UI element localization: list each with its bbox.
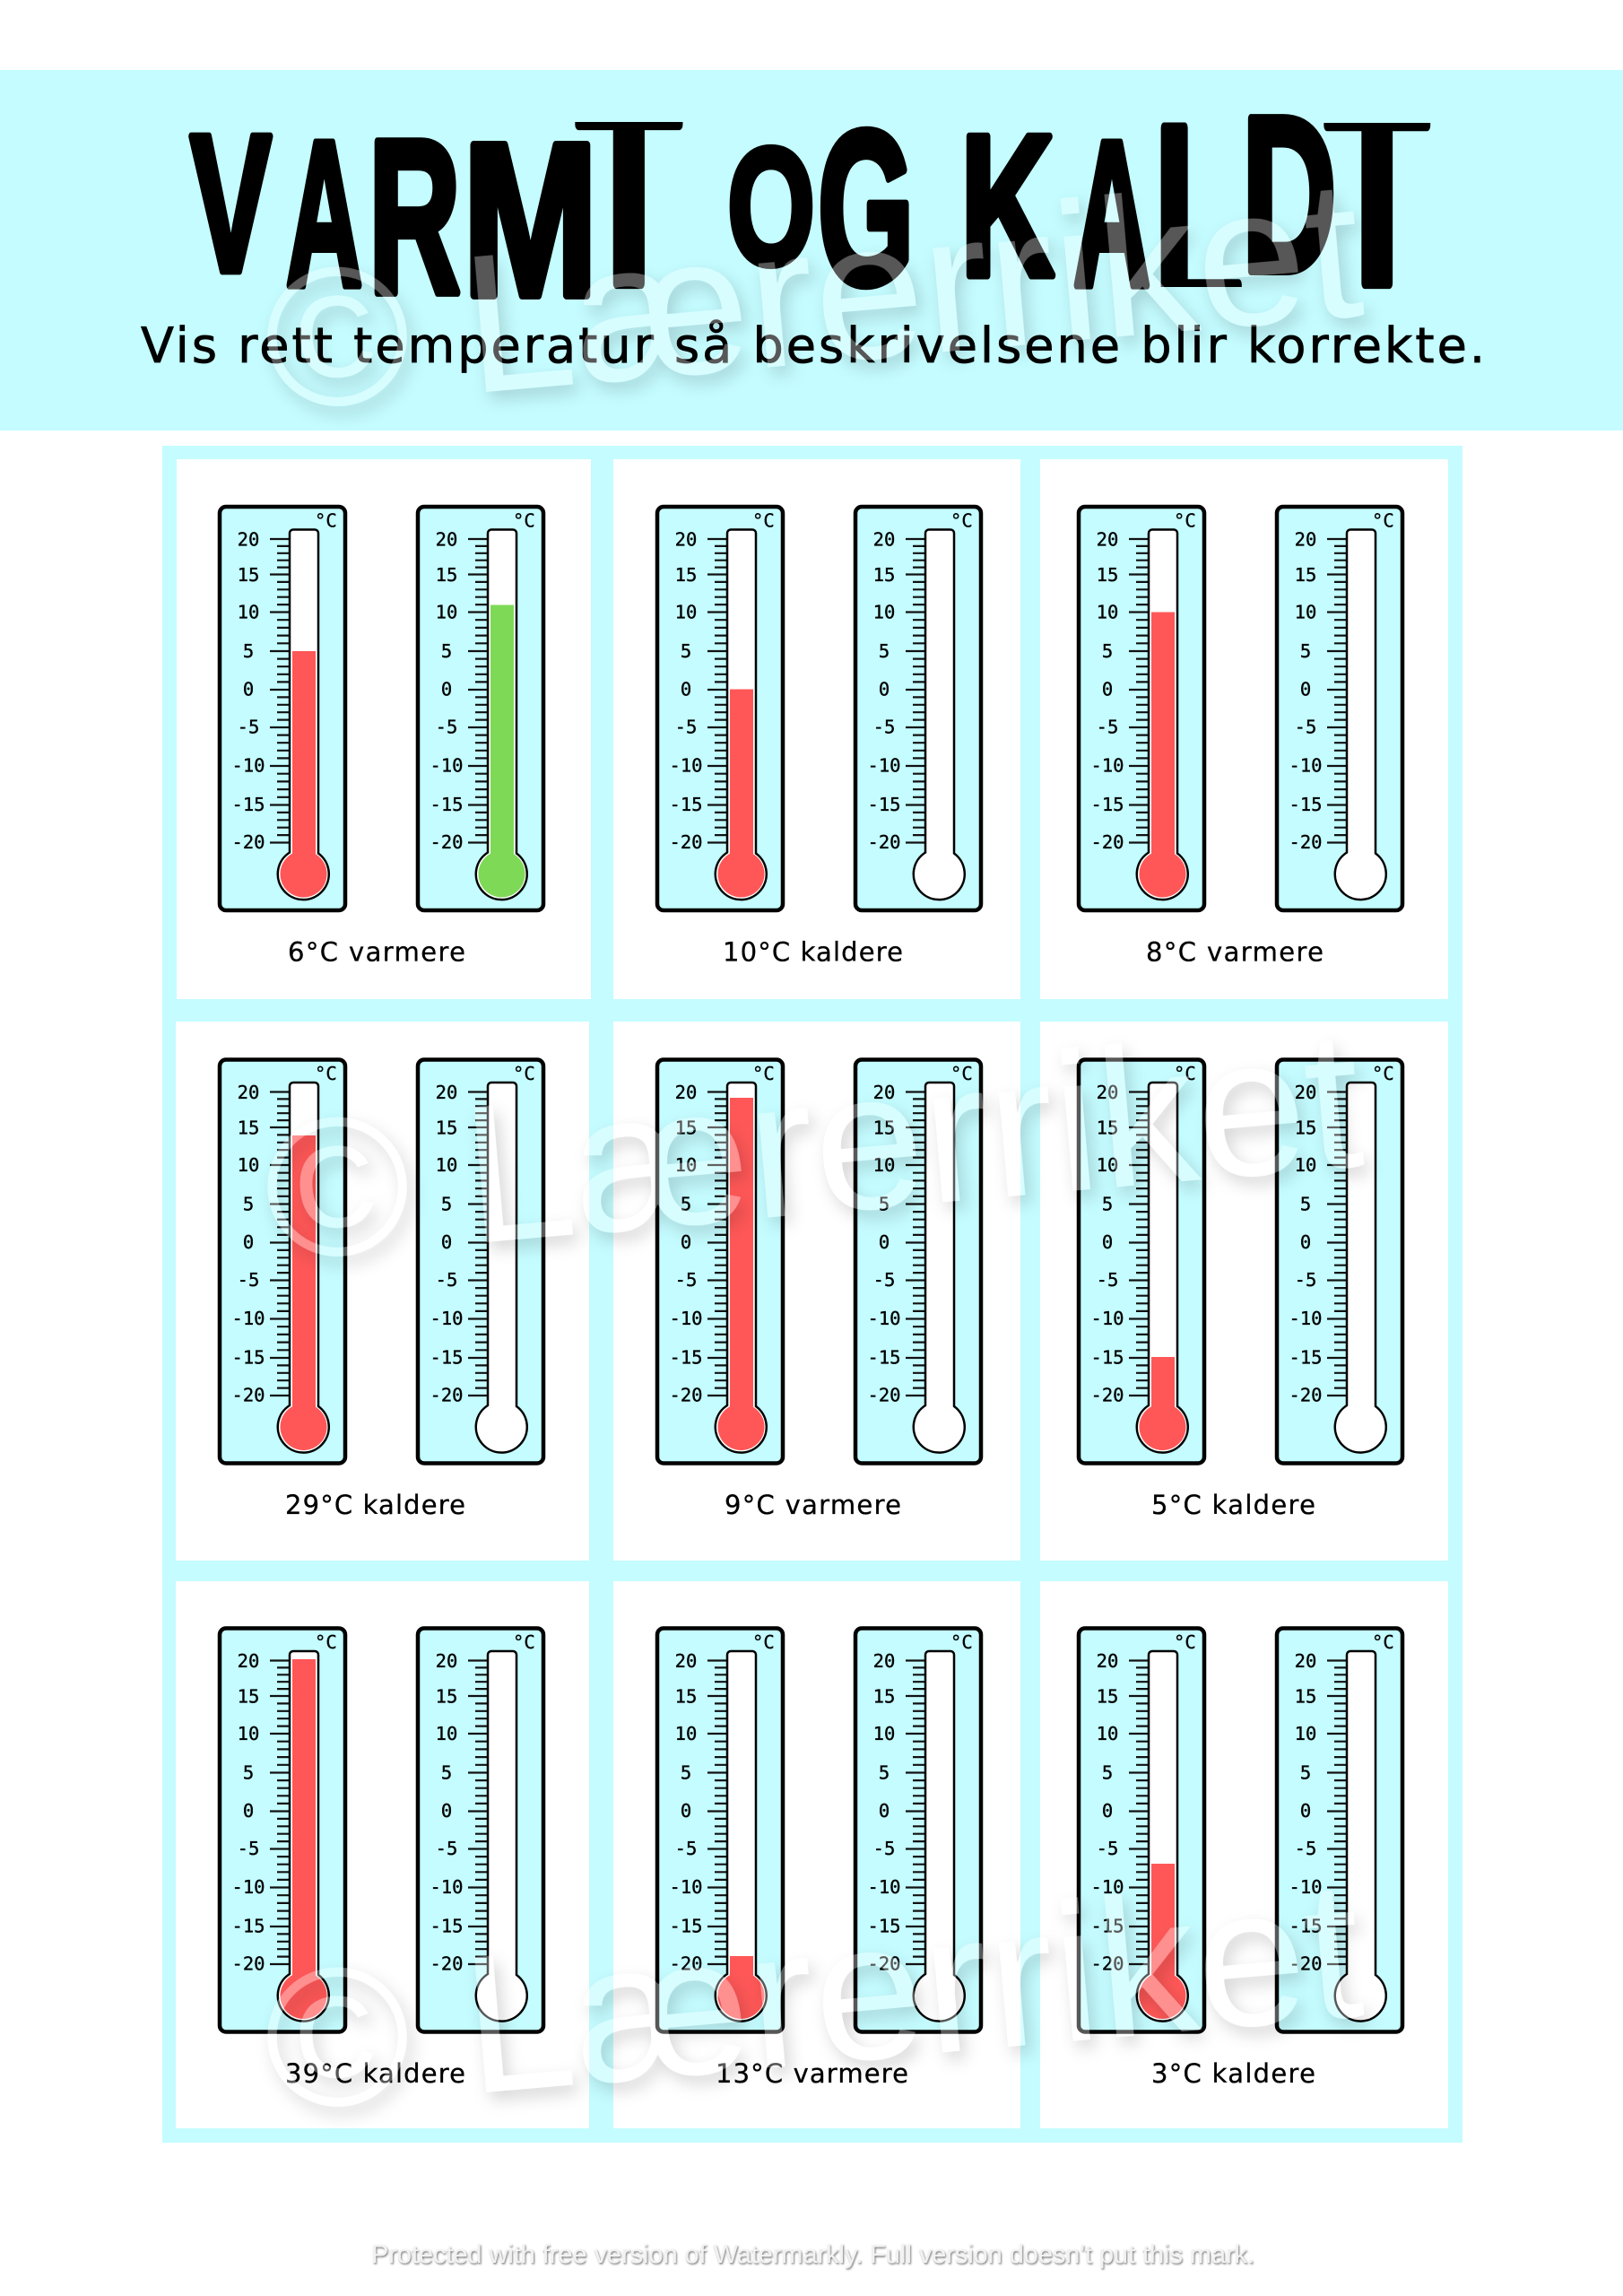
thermometer: empty: 5 <box>441 1193 452 1214</box>
thermometer: red at 0: -20 <box>669 831 703 853</box>
thermometer: empty: -20 <box>1289 1953 1323 1975</box>
thermometer: red at -19 <box>657 1629 783 2032</box>
thermometer: empty: 20 <box>436 1650 457 1672</box>
thermometer: red at -19: -10 <box>669 1876 703 1898</box>
thermometer: red at 14: 0 <box>243 1231 254 1253</box>
thermometer: empty: -15 <box>1289 794 1323 815</box>
thermometer: empty: 0 <box>879 1800 890 1822</box>
thermometer: red at 10: -10 <box>1090 755 1124 777</box>
thermometer: red at -15 <box>1079 1060 1204 1464</box>
thermometer: empty: -5 <box>1295 1838 1316 1859</box>
header band <box>0 70 1623 430</box>
thermometer: empty: 10 <box>873 601 895 622</box>
title: K <box>960 94 1055 319</box>
thermometer: red at 19: -10 <box>669 1308 703 1329</box>
thermometer: empty: 10 <box>1295 1723 1316 1744</box>
thermometer: red at -15: -5 <box>1097 1269 1118 1291</box>
title: D <box>1242 70 1336 317</box>
thermometer: red at -19: 0 <box>681 1800 691 1822</box>
panel: 13°C varmere <box>613 1581 1020 2128</box>
thermometer: red at 20: °C <box>315 1631 337 1653</box>
thermometer: empty: °C <box>1372 1063 1394 1084</box>
panel: 6°C varmere <box>177 459 591 999</box>
thermometer: red at 5: -15 <box>231 794 265 815</box>
thermometer: red at 20: 15 <box>238 1686 259 1708</box>
thermometer: red at 10: -20 <box>1090 831 1124 853</box>
title <box>188 114 1431 300</box>
thermometer: red at 19: -5 <box>675 1269 697 1291</box>
thermometer: green at 11: 15 <box>436 564 457 586</box>
thermometer: red at -7 <box>1079 1629 1204 2032</box>
thermometer: empty: -20 <box>867 1953 901 1975</box>
thermometer: red at 14: 20 <box>238 1082 259 1103</box>
caption: 3°C kaldere <box>1151 2058 1315 2089</box>
thermometer: empty <box>1277 1629 1402 2032</box>
thermometer: empty: -15 <box>867 794 901 815</box>
thermometer: red at 10: 10 <box>1097 601 1118 622</box>
thermometer: red at 20: -5 <box>238 1838 259 1859</box>
thermometer: empty: 5 <box>1300 640 1311 662</box>
thermometer: red at 0: 10 <box>675 601 697 622</box>
thermometer: red at -7: -10 <box>1090 1876 1124 1898</box>
thermometer: red at 20: 5 <box>243 1761 254 1783</box>
title: A <box>1073 98 1150 329</box>
thermometer: empty: 20 <box>1295 1082 1316 1103</box>
thermometer: red at 20: 0 <box>243 1800 254 1822</box>
caption: 13°C varmere <box>716 2058 908 2089</box>
thermometer: red at 5: -5 <box>238 716 259 737</box>
thermometer: empty: 15 <box>873 564 895 586</box>
thermometer: empty: 0 <box>879 1231 890 1253</box>
thermometer: red at 5: -20 <box>231 831 265 853</box>
thermometer: red at 0: 20 <box>675 529 697 551</box>
caption: 6°C varmere <box>288 936 465 967</box>
thermometer: red at -7: 15 <box>1097 1686 1118 1708</box>
thermometer: empty: -10 <box>867 755 901 777</box>
thermometer: empty: -15 <box>867 1916 901 1937</box>
thermometer: red at 5 <box>220 507 345 910</box>
thermometer: empty: -15 <box>1289 1347 1323 1369</box>
thermometer: empty: 15 <box>436 1118 457 1139</box>
thermometer: red at 14: °C <box>315 1063 337 1084</box>
thermometer: red at 20: 10 <box>238 1723 259 1744</box>
thermometer: empty: 20 <box>873 1082 895 1103</box>
thermometer: empty: 5 <box>441 1761 452 1783</box>
thermometer: empty: 0 <box>879 678 890 700</box>
thermometer: empty: -5 <box>1295 1269 1316 1291</box>
thermometer: red at 5: 20 <box>238 529 259 551</box>
thermometer: green at 11: -15 <box>430 794 464 815</box>
thermometer: red at -7: 5 <box>1102 1761 1113 1783</box>
thermometer: empty: 10 <box>873 1723 895 1744</box>
title: G <box>818 87 914 331</box>
thermometer: red at -19: -20 <box>669 1953 703 1975</box>
thermometer: empty: 20 <box>873 529 895 551</box>
thermometer: empty: -10 <box>430 1308 464 1329</box>
thermometer: empty: -10 <box>1289 755 1323 777</box>
thermometer: red at 10: 15 <box>1097 564 1118 586</box>
thermometer: red at -19: 20 <box>675 1650 697 1672</box>
thermometer: empty: 20 <box>436 1082 457 1103</box>
thermometer: empty: -20 <box>867 1385 901 1406</box>
thermometer: empty: °C <box>950 509 973 531</box>
thermometer: red at 20: 20 <box>238 1650 259 1672</box>
thermometer: green at 11: 10 <box>436 601 457 622</box>
thermometer: red at 19 <box>657 1060 783 1464</box>
thermometer: red at 19: 0 <box>681 1231 691 1253</box>
thermometer: empty <box>855 1629 981 2032</box>
thermometer: red at 14: 15 <box>238 1118 259 1139</box>
thermometer: red at 0: 0 <box>681 678 691 700</box>
thermometer: empty: -15 <box>430 1347 464 1369</box>
thermometer: empty: 0 <box>1300 1800 1311 1822</box>
thermometer: red at 14: -20 <box>231 1385 265 1406</box>
thermometer: red at 14: -5 <box>238 1269 259 1291</box>
thermometer: empty <box>855 507 981 910</box>
thermometer: red at -15: °C <box>1174 1063 1196 1084</box>
thermometer: empty: -5 <box>436 1838 457 1859</box>
thermometer: red at -19: 10 <box>675 1723 697 1744</box>
thermometer: red at -7: 20 <box>1097 1650 1118 1672</box>
thermometer: red at 10: 5 <box>1102 640 1113 662</box>
thermometer: empty: 15 <box>436 1686 457 1708</box>
thermometer: empty: 10 <box>1295 1154 1316 1176</box>
thermometer: red at 0: -10 <box>669 755 703 777</box>
thermometer: red at -19: 5 <box>681 1761 691 1783</box>
thermometer: red at 10: 0 <box>1102 678 1113 700</box>
title: O <box>727 113 815 300</box>
thermometer: red at 14: -10 <box>231 1308 265 1329</box>
thermometer: empty: °C <box>950 1063 973 1084</box>
thermometer: empty: -20 <box>430 1953 464 1975</box>
thermometer: empty: °C <box>950 1631 973 1653</box>
thermometer: empty: 20 <box>1295 529 1316 551</box>
title: T <box>1325 36 1428 342</box>
thermometer: red at 0: 15 <box>675 564 697 586</box>
caption: 8°C varmere <box>1146 936 1324 967</box>
panel: 29°C kaldere <box>176 1022 589 1561</box>
thermometer: empty: 5 <box>1300 1761 1311 1783</box>
thermometer: red at 14: 10 <box>238 1154 259 1176</box>
thermometer: red at 0: 5 <box>681 640 691 662</box>
thermometer: empty <box>1277 1060 1402 1464</box>
thermometer: red at -19: 15 <box>675 1686 697 1708</box>
panel: 3°C kaldere <box>1040 1581 1448 2128</box>
thermometer: red at 19: -15 <box>669 1347 703 1369</box>
thermometer: green at 11: 0 <box>441 678 452 700</box>
thermometer: green at 11: 20 <box>436 529 457 551</box>
thermometer: red at 19: 20 <box>675 1082 697 1103</box>
caption: 9°C varmere <box>725 1490 901 1520</box>
watermark: top: © Lærerriket <box>256 137 1369 453</box>
thermometer: empty: -10 <box>1289 1308 1323 1329</box>
watermark: middle: © Lærerriket <box>256 987 1369 1303</box>
thermometer: red at 5: 15 <box>238 564 259 586</box>
thermometer: red at 5: 5 <box>243 640 254 662</box>
thermometer: empty <box>418 1060 543 1464</box>
watermark: bottom: © Lærerriket <box>256 1838 1369 2153</box>
thermometer: empty <box>418 1629 543 2032</box>
thermometer: empty: °C <box>1372 509 1394 531</box>
thermometer: empty <box>1277 507 1402 910</box>
thermometer: empty: 5 <box>1300 1193 1311 1214</box>
thermometer: red at -19: °C <box>752 1631 775 1653</box>
thermometer: red at -7: -20 <box>1090 1953 1124 1975</box>
title: R <box>369 95 461 340</box>
thermometer: red at -15: 5 <box>1102 1193 1113 1214</box>
thermometer: red at 14: 5 <box>243 1193 254 1214</box>
caption: 5°C kaldere <box>1151 1490 1315 1520</box>
thermometer: empty: °C <box>1372 1631 1394 1653</box>
thermometer: red at 19: 10 <box>675 1154 697 1176</box>
thermometer: red at 10: 20 <box>1097 529 1118 551</box>
thermometer: empty: 10 <box>1295 601 1316 622</box>
thermometer: red at 0: -5 <box>675 716 697 737</box>
thermometer: green at 11 <box>418 507 543 910</box>
thermometer: red at -7: -5 <box>1097 1838 1118 1859</box>
thermometer: red at 5: 0 <box>243 678 254 700</box>
thermometer: red at 0 <box>657 507 783 910</box>
thermometer: empty: -20 <box>430 1385 464 1406</box>
thermometer: red at 20: -15 <box>231 1916 265 1937</box>
thermometer: red at -15: 20 <box>1097 1082 1118 1103</box>
title: M <box>463 99 598 342</box>
thermometer: red at 20 <box>220 1629 345 2032</box>
panel: 10°C kaldere <box>613 459 1020 999</box>
thermometer: empty: -15 <box>1289 1916 1323 1937</box>
thermometer: green at 11: -10 <box>430 755 464 777</box>
thermometer: empty: 0 <box>1300 678 1311 700</box>
thermometer: red at -15: 10 <box>1097 1154 1118 1176</box>
thermometer: empty: °C <box>513 1063 535 1084</box>
thermometer: red at 19: 15 <box>675 1118 697 1139</box>
thermometer: red at -19: -15 <box>669 1916 703 1937</box>
thermometer: red at -7: 10 <box>1097 1723 1118 1744</box>
thermometer: red at 5: °C <box>315 509 337 531</box>
thermometer: empty: -5 <box>436 1269 457 1291</box>
thermometer: empty: -10 <box>430 1876 464 1898</box>
thermometer: green at 11: -20 <box>430 831 464 853</box>
thermometer: red at -19: -5 <box>675 1838 697 1859</box>
thermometer: red at -7: -15 <box>1090 1916 1124 1937</box>
thermometer: empty: 10 <box>873 1154 895 1176</box>
thermometer: empty: -5 <box>873 1269 895 1291</box>
thermometer: empty: -5 <box>1295 716 1316 737</box>
thermometer: green at 11: -5 <box>436 716 457 737</box>
thermometer: empty: -10 <box>867 1876 901 1898</box>
title: T <box>577 36 681 343</box>
panel: 5°C kaldere <box>1040 1022 1448 1561</box>
thermometer: red at 20: -10 <box>231 1876 265 1898</box>
thermometer: empty: -15 <box>430 1916 464 1937</box>
thermometer: empty: 5 <box>879 640 890 662</box>
thermometer: red at -15: -15 <box>1090 1347 1124 1369</box>
caption: 39°C kaldere <box>285 2058 465 2089</box>
thermometer: empty: -20 <box>1289 831 1323 853</box>
title: A <box>286 98 362 329</box>
thermometer: red at 14: -15 <box>231 1347 265 1369</box>
panel: 39°C kaldere <box>176 1581 589 2128</box>
thermometer: empty: °C <box>513 1631 535 1653</box>
thermometer: empty: 15 <box>873 1118 895 1139</box>
thermometer: empty: -10 <box>867 1308 901 1329</box>
thermometer: empty: 0 <box>441 1231 452 1253</box>
thermometer: red at -15: 15 <box>1097 1118 1118 1139</box>
footer watermark notice: Protected with free version of Watermarkly. Full version doesn't put this mark. <box>371 2240 1254 2269</box>
thermometer: green at 11: 5 <box>441 640 452 662</box>
thermometer: green at 11: °C <box>513 509 535 531</box>
thermometer: red at 19: 5 <box>681 1193 691 1214</box>
thermometer: red at 10: -5 <box>1097 716 1118 737</box>
thermometer: empty: 10 <box>436 1154 457 1176</box>
thermometer: red at 20: -20 <box>231 1953 265 1975</box>
thermometer: empty: 15 <box>873 1686 895 1708</box>
thermometer: red at 5: -10 <box>231 755 265 777</box>
panel: 9°C varmere <box>613 1022 1020 1561</box>
thermometer: red at 0: -15 <box>669 794 703 815</box>
title: L <box>1154 69 1244 373</box>
thermometer: empty <box>855 1060 981 1464</box>
thermometer: empty: 15 <box>1295 564 1316 586</box>
thermometer: red at -7: 0 <box>1102 1800 1113 1822</box>
thermometer: red at -15: -20 <box>1090 1385 1124 1406</box>
thermometer: red at 10 <box>1079 507 1204 910</box>
thermometer: red at 0: °C <box>752 509 775 531</box>
thermometer: red at 5: 10 <box>238 601 259 622</box>
thermometer: red at 10: -15 <box>1090 794 1124 815</box>
thermometer: red at -15: -10 <box>1090 1308 1124 1329</box>
thermometer: empty: 15 <box>1295 1118 1316 1139</box>
caption: 29°C kaldere <box>285 1490 465 1520</box>
thermometer: empty: 15 <box>1295 1686 1316 1708</box>
thermometer: empty: -20 <box>1289 1385 1323 1406</box>
thermometer: empty: 20 <box>873 1650 895 1672</box>
thermometer: empty: -15 <box>867 1347 901 1369</box>
thermometer: empty: 10 <box>436 1723 457 1744</box>
thermometer: red at 19: -20 <box>669 1385 703 1406</box>
subtitle: Vis rett temperatur så beskrivelsene blir korrekte. <box>141 317 1485 374</box>
thermometer: red at 19: °C <box>752 1063 775 1084</box>
panel frame <box>162 446 1462 2143</box>
thermometer: red at -15: 0 <box>1102 1231 1113 1253</box>
thermometer: empty: 5 <box>879 1193 890 1214</box>
thermometer: empty: -10 <box>1289 1876 1323 1898</box>
thermometer: empty: 5 <box>879 1761 890 1783</box>
thermometer: red at 14 <box>220 1060 345 1464</box>
thermometer: empty: 0 <box>1300 1231 1311 1253</box>
title: V <box>190 94 272 313</box>
thermometer: empty: -20 <box>867 831 901 853</box>
thermometer: empty: -5 <box>873 716 895 737</box>
thermometer: red at -7: °C <box>1174 1631 1196 1653</box>
thermometer: empty: 20 <box>1295 1650 1316 1672</box>
panel: 8°C varmere <box>1040 459 1448 999</box>
thermometer: red at 10: °C <box>1174 509 1196 531</box>
caption: 10°C kaldere <box>723 936 903 967</box>
thermometer: empty: -5 <box>873 1838 895 1859</box>
thermometer: empty: 0 <box>441 1800 452 1822</box>
